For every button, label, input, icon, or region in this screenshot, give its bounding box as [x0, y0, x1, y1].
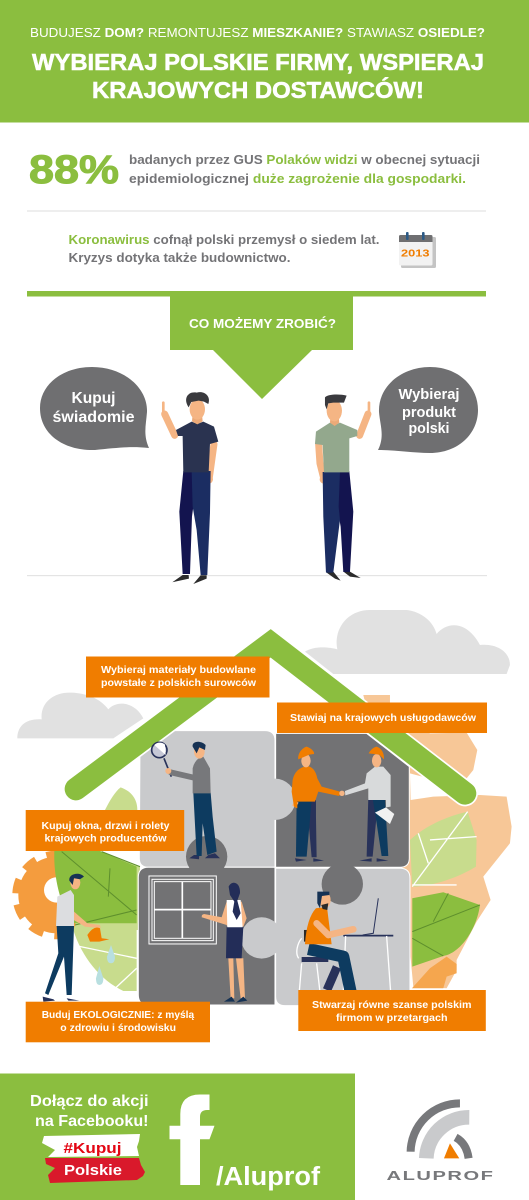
label: materials: Wybieraj materiały budowlane: [101, 664, 256, 676]
header banner: [0, 0, 529, 122]
speech bubble right: polski: [408, 420, 450, 437]
icon: calendar 2013: 2013: [401, 248, 430, 260]
icon: calendar 2013: [399, 232, 436, 268]
statistic description: epidemiologicznej duże zagrożenie dla gospodarki.: [129, 172, 466, 186]
Aluprof logo: ALUPROF: [386, 1168, 494, 1183]
label: ecological: o zdrowiu i środowisku: [60, 1022, 176, 1034]
campaign badge: #Kupuj: [64, 1141, 122, 1157]
campaign badge: Polskie: [64, 1163, 122, 1179]
person right: [315, 395, 369, 581]
statistic description: badanych przez GUS Polaków widzi w obecnej sytuacji: [129, 153, 480, 167]
facebook handle: /Aluprof: [216, 1163, 321, 1191]
label: tenders: firmom w przetargach: [336, 1012, 448, 1024]
title: [32, 49, 484, 103]
leaf left small: [105, 787, 137, 810]
cloud right: [305, 610, 510, 674]
label: windows and doors: krajowych producentów: [44, 832, 167, 844]
statistic: 88%: 88%: [29, 148, 119, 192]
roof: [76, 643, 465, 793]
speech bubble right: Wybieraj: [398, 386, 460, 403]
figure: inspector with magnifier: [152, 742, 220, 859]
leaf right lower: [412, 892, 480, 967]
callout: what can we do: CO MOŻEMY ZROBIĆ?: [189, 316, 336, 331]
speech bubble left: Kupuj: [72, 390, 116, 407]
label: windows and doors: Kupuj okna, drzwi i rolety: [42, 820, 170, 832]
title: WYBIERAJ POLSKIE FIRMY, WSPIERAJ: [32, 49, 484, 75]
footer call to action: Dołącz do akcji: [30, 1093, 148, 1110]
coronavirus text: [68, 233, 380, 265]
label: ecological: [26, 1002, 210, 1042]
speech bubble right: [378, 367, 478, 453]
person left: [163, 392, 218, 584]
label: ecological: Buduj EKOLOGICZNIE: z myślą: [42, 1009, 194, 1021]
callout: what can we do: [170, 296, 353, 399]
header question line: BUDUJESZ DOM? REMONTUJESZ MIESZKANIE? STAWIASZ OSIEDLE?: [30, 26, 485, 40]
footer panel: [0, 1074, 355, 1200]
icon: facebook f: [170, 1094, 214, 1185]
green bar: [27, 291, 486, 296]
label: tenders: Stwarzaj równe szanse polskim: [312, 999, 472, 1011]
puzzle piece top right: [276, 733, 409, 867]
label: tenders: [298, 990, 486, 1031]
puzzle piece bottom right: [276, 868, 410, 1006]
window: [149, 876, 216, 944]
leaf left: [54, 851, 140, 991]
coronavirus text: Kryzys dotyka także budownictwo.: [68, 251, 290, 265]
title: KRAJOWYCH DOSTAWCÓW!: [92, 76, 424, 103]
label: windows and doors: [26, 810, 184, 851]
footer call to action: na Facebooku!: [35, 1113, 148, 1130]
speech bubble right: produkt: [402, 404, 456, 421]
figure: man with watering can: [43, 874, 115, 1002]
statistic description: [129, 153, 480, 186]
label: domestic service providers: [277, 702, 487, 733]
gear right: [363, 695, 512, 988]
coronavirus text: Koronawirus cofnął polski przemysł o siedem lat.: [68, 233, 380, 247]
puzzle piece bottom left: [138, 867, 275, 1005]
puzzle piece top left: [139, 731, 275, 867]
label: domestic service providers: Stawiaj na krajowych usługodawców: [290, 712, 477, 724]
figure: man at laptop: [297, 892, 393, 992]
house illustration: [17, 610, 512, 1006]
label: materials: powstałe z polskich surowców: [101, 677, 257, 689]
speech bubble left: [40, 367, 149, 450]
footer call to action: [30, 1093, 148, 1130]
figure: builders shaking hands: [292, 747, 394, 862]
label: materials: [86, 656, 270, 698]
Aluprof logo: [386, 1103, 494, 1183]
leaf right upper: [410, 812, 477, 887]
figure: woman at window: [149, 876, 247, 1003]
speech bubble left: świadomie: [52, 409, 135, 426]
cloud left: [17, 693, 143, 738]
campaign badge: [42, 1134, 145, 1183]
gear left: [17, 856, 96, 934]
